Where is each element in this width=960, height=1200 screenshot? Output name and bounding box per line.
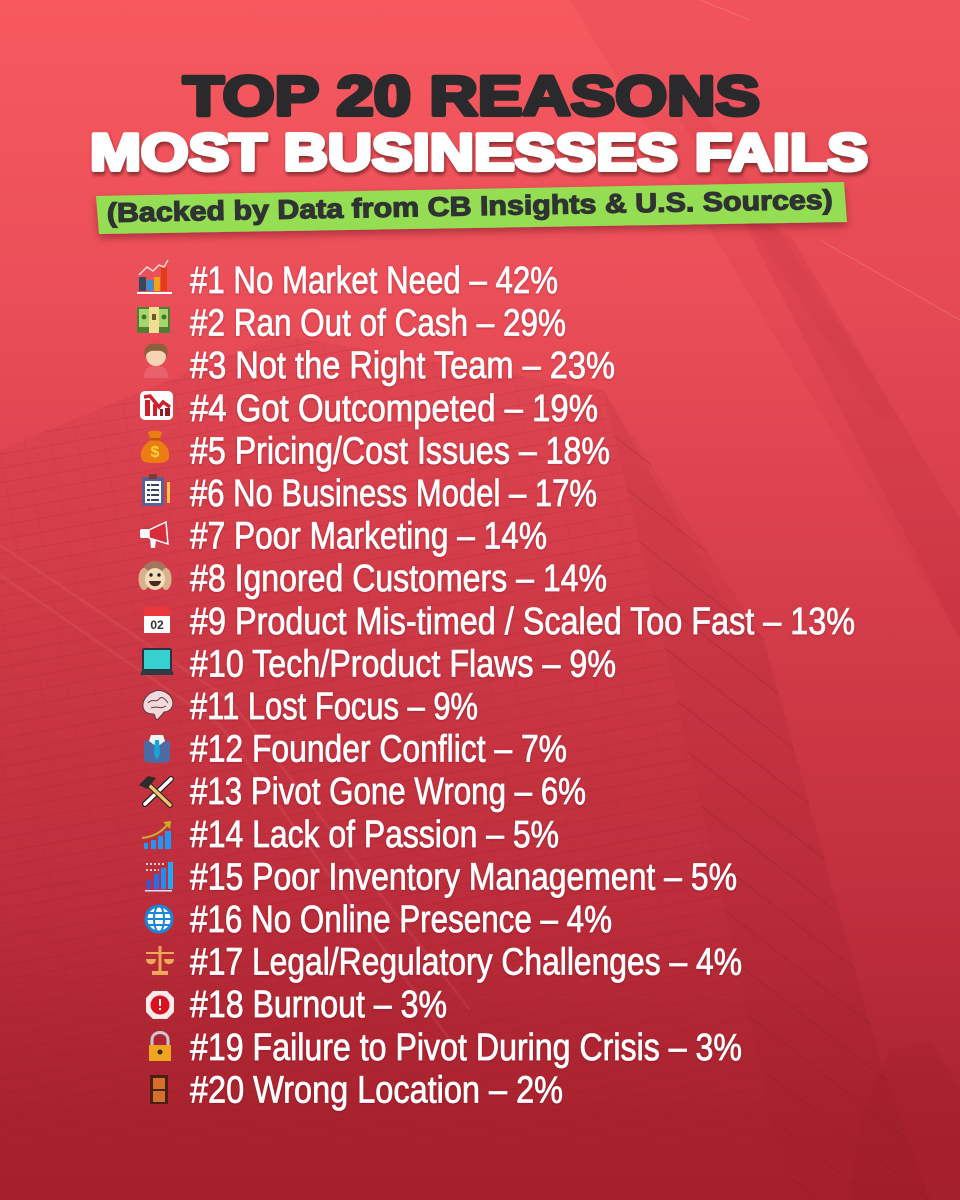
reason 10: #10 Tech/Product Flaws – 9% xyxy=(190,643,616,685)
title line 1: TOP 20 REASONS xyxy=(183,64,760,127)
subtitle banner xyxy=(96,182,847,234)
reason 19: #19 Failure to Pivot During Crisis – 3% xyxy=(190,1027,742,1069)
icon: padlock xyxy=(149,1032,171,1061)
icon: hammer and wrench xyxy=(139,776,171,805)
reason 17: #17 Legal/Regulatory Challenges – 4% xyxy=(190,942,742,984)
icon: falling chart xyxy=(140,391,173,420)
icon: bar chart xyxy=(137,260,172,294)
icon: cash xyxy=(137,307,170,333)
icon: money bag: $ xyxy=(151,444,160,461)
reason 15: #15 Poor Inventory Management – 5% xyxy=(190,856,737,898)
reason 18: #18 Burnout – 3% xyxy=(190,984,447,1026)
reason 16: #16 No Online Presence – 4% xyxy=(190,899,612,941)
reason 14: #14 Lack of Passion – 5% xyxy=(190,814,559,856)
reason 12: #12 Founder Conflict – 7% xyxy=(190,729,567,771)
icon: suit and tie xyxy=(144,735,170,763)
icon: person xyxy=(144,344,168,378)
icon: money bag xyxy=(141,431,169,463)
title line 2: MOST BUSINESSES FAILS xyxy=(90,124,868,182)
reason 7: #7 Poor Marketing – 14% xyxy=(190,516,547,558)
reason 3: #3 Not the Right Team – 23% xyxy=(190,345,615,387)
reason 20: #20 Wrong Location – 2% xyxy=(190,1069,563,1111)
icon: globe xyxy=(146,906,172,932)
reason 2: #2 Ran Out of Cash – 29% xyxy=(190,303,566,345)
reason 6: #6 No Business Model – 17% xyxy=(190,473,597,515)
icon: calendar xyxy=(144,607,170,633)
reason 11: #11 Lost Focus – 9% xyxy=(190,686,478,728)
reason 8: #8 Ignored Customers – 14% xyxy=(190,558,607,600)
reason 5: #5 Pricing/Cost Issues – 18% xyxy=(190,430,610,472)
icon: inventory bars xyxy=(145,862,173,892)
reason 4: #4 Got Outcompeted – 19% xyxy=(190,388,598,430)
reason 1: #1 No Market Need – 42% xyxy=(190,260,558,302)
list of reasons xyxy=(137,260,855,1111)
icon: clipboard xyxy=(142,474,170,506)
reason 13: #13 Pivot Gone Wrong – 6% xyxy=(190,771,586,813)
subtitle text: (Backed by Data from CB Insights & U.S. Sources) xyxy=(107,185,833,228)
icon: monkey xyxy=(138,561,172,590)
icon: megaphone xyxy=(140,522,168,548)
title xyxy=(90,64,868,182)
icon: laptop xyxy=(140,649,174,675)
icon: growth chart xyxy=(142,821,171,849)
icon: scales xyxy=(146,946,174,975)
icon: brain xyxy=(143,690,173,720)
icon: stop sign xyxy=(146,991,174,1019)
icon: door xyxy=(150,1075,168,1104)
reason 9: #9 Product Mis-timed / Scaled Too Fast – 13% xyxy=(190,601,855,643)
icon: calendar: 02 xyxy=(150,618,164,632)
